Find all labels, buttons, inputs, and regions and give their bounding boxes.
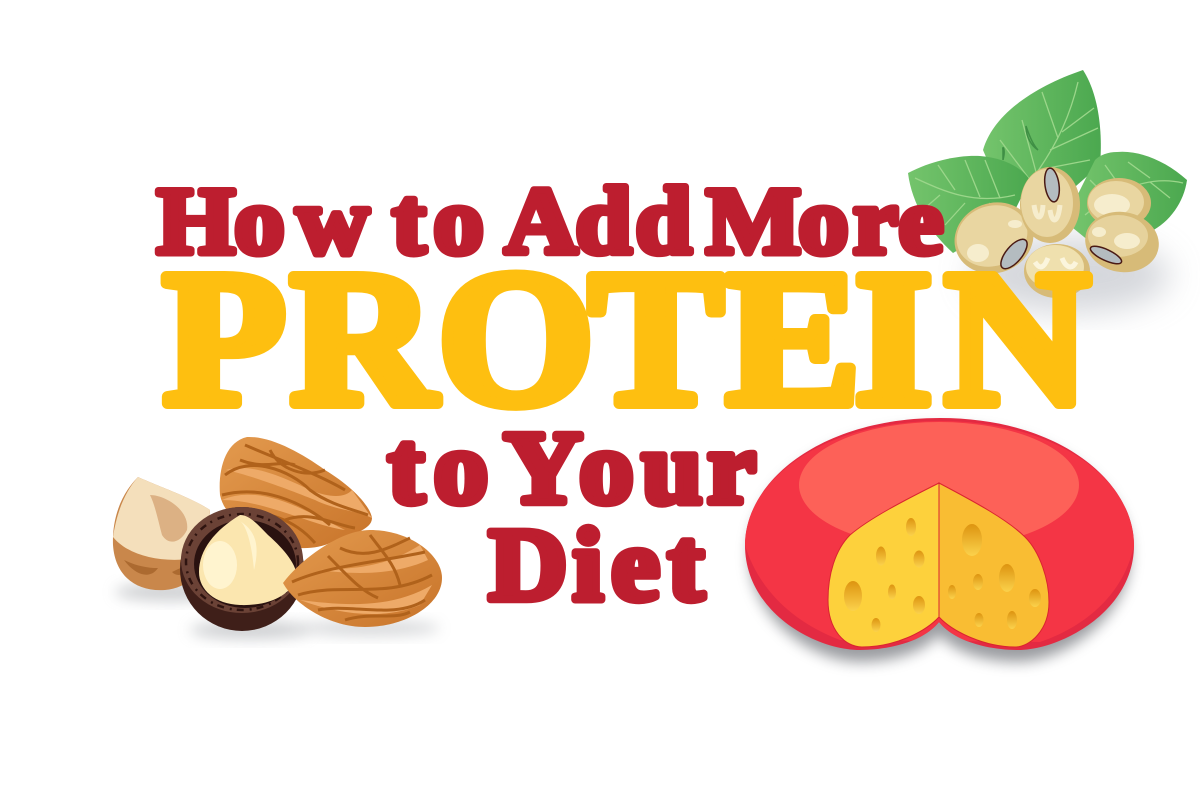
icon: top leaf — [983, 70, 1101, 200]
icon: almond front — [283, 530, 442, 627]
cheese wedge left — [828, 483, 939, 647]
cheese holes — [844, 518, 1041, 632]
cheese rind side — [745, 421, 1134, 642]
infographic canvas — [112, 70, 1187, 672]
cheese top highlight — [799, 422, 1079, 548]
title line: to Your: to Your — [388, 411, 756, 526]
title line: Diet: Diet — [489, 508, 705, 623]
icon: macadamia in shell — [180, 507, 304, 631]
title line: PROTEIN: PROTEIN — [163, 231, 1090, 446]
icon: right leaf — [1073, 152, 1187, 250]
icon: soybean top centre — [1020, 167, 1080, 243]
icon: soybeans and leaves — [908, 70, 1187, 313]
cheese red rind — [745, 418, 1134, 650]
icon: almond back — [220, 437, 372, 548]
icon: nuts group — [113, 437, 442, 639]
title — [157, 170, 1090, 623]
icon: soybean rear right — [1087, 178, 1151, 228]
icon: soybean front right — [1080, 206, 1164, 278]
icon: cheese wheel — [745, 418, 1134, 662]
icon: soybean left — [944, 191, 1044, 285]
icon: left leaf — [908, 156, 1030, 253]
title line: How to Add More: How to Add More — [157, 170, 943, 274]
cheese wedge right — [939, 483, 1049, 647]
icon: soybean bottom centre — [1024, 244, 1090, 298]
icon: hazelnut half — [113, 477, 210, 590]
